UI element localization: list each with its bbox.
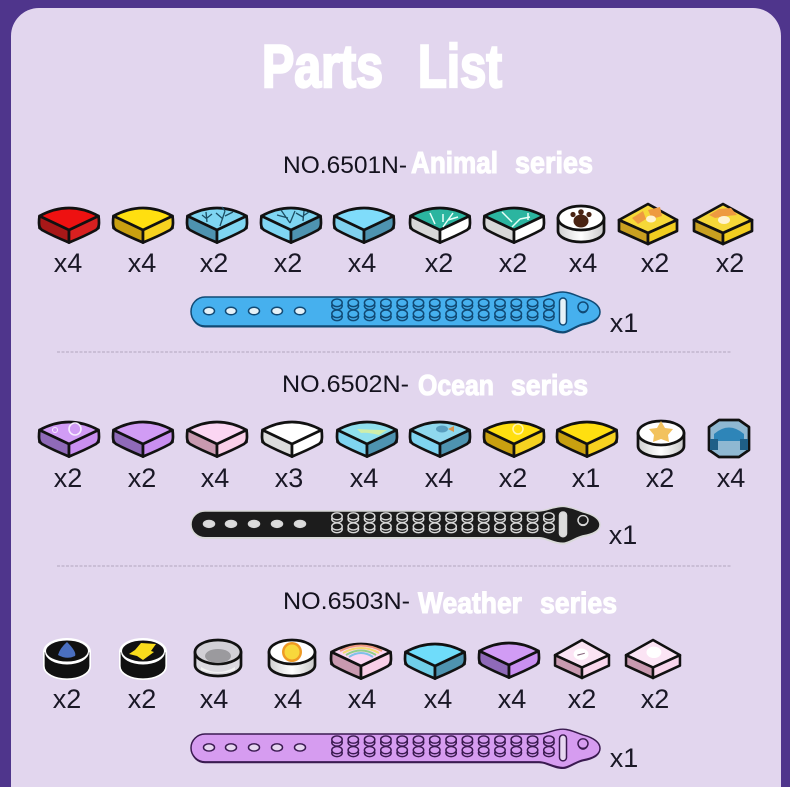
quantity labels: weather parts: x4	[274, 684, 302, 714]
icon: cracked blue wedge left	[187, 207, 247, 242]
quantity labels: animal parts: x4	[569, 248, 597, 278]
icon: raindrop disc	[45, 640, 89, 678]
quantity labels: ocean parts: x1	[572, 463, 600, 493]
icon: black wristband	[191, 506, 600, 545]
quantity label: blue wristband: x1	[610, 308, 638, 338]
quantity labels: animal parts: x2	[425, 248, 453, 278]
title: Parts	[262, 33, 383, 100]
icon: red wedge	[39, 208, 99, 242]
quantity labels: ocean parts: x2	[128, 463, 156, 493]
icon: yellow wedge	[113, 208, 173, 242]
icon: lightning disc	[121, 640, 165, 678]
heading: Weather series	[283, 587, 617, 620]
icon: pink tile one	[555, 640, 609, 678]
quantity labels: weather parts: x2	[53, 684, 81, 714]
icon: white wedge	[262, 422, 322, 456]
icon: pink wedge	[187, 422, 247, 456]
section: Animal series	[39, 145, 752, 338]
icon: purple wedge	[479, 643, 539, 678]
icon: fish wedge	[410, 422, 470, 456]
heading: Animal series	[283, 145, 593, 180]
icon: teal wedge right	[484, 208, 544, 242]
icon: yellow wedge	[557, 422, 617, 456]
icon: purple wedge	[113, 422, 173, 456]
title: List	[418, 33, 502, 100]
quantity labels: weather parts: x4	[200, 684, 228, 714]
quantity labels: ocean parts: x4	[717, 463, 745, 493]
quantity labels: animal parts: x4	[54, 248, 82, 278]
icon: transparent blue octagon	[709, 420, 749, 457]
quantity labels: ocean parts: x3	[275, 463, 303, 493]
quantity labels: animal parts: x2	[641, 248, 669, 278]
icon: rainbow wedge	[331, 644, 391, 678]
heading: Ocean series: series	[511, 370, 588, 402]
quantity labels: animal parts: x4	[128, 248, 156, 278]
icon: blue wedge	[334, 208, 394, 242]
quantity labels: ocean parts: x2	[499, 463, 527, 493]
icon: sun disc	[269, 640, 315, 676]
section: Ocean series	[39, 370, 749, 550]
quantity label: black wristband: x1	[609, 520, 637, 550]
heading: Weather series: series	[540, 587, 617, 620]
heading: Animal series: NO.6501N-	[283, 152, 407, 179]
quantity labels: weather parts: x4	[348, 684, 376, 714]
quantity labels: animal parts: x2	[200, 248, 228, 278]
quantity labels: ocean parts: x2	[54, 463, 82, 493]
quantity labels: animal parts	[54, 248, 744, 278]
section: Weather series	[45, 587, 680, 773]
icon: pink tile two	[626, 640, 680, 678]
icon: paw disc	[558, 206, 604, 242]
quantity labels: ocean parts: x2	[646, 463, 674, 493]
icon: yellow bubble wedge	[484, 422, 544, 456]
heading: Weather series: NO.6503N-	[283, 588, 410, 615]
icon: starfish disc	[638, 421, 684, 457]
quantity labels: weather parts: x2	[568, 684, 596, 714]
heading: Ocean series: NO.6502N-	[282, 371, 409, 398]
quantity labels: ocean parts: x4	[201, 463, 229, 493]
quantity labels: weather parts	[53, 684, 669, 714]
heading: Animal series: Animal	[411, 145, 498, 180]
icon: cracked blue wedge right	[261, 208, 321, 242]
quantity labels: animal parts: x2	[716, 248, 744, 278]
icon: clear disc	[195, 640, 241, 676]
heading: Ocean series: Ocean	[418, 370, 494, 402]
quantity labels: weather parts: x2	[641, 684, 669, 714]
quantity labels: weather parts: x4	[424, 684, 452, 714]
quantity labels: ocean parts: x4	[350, 463, 378, 493]
quantity labels: ocean parts: x4	[425, 463, 453, 493]
icon: purple wristband	[191, 729, 600, 769]
icon: yellow cat tile one	[619, 204, 677, 244]
heading: Animal series: series	[515, 145, 593, 180]
icon: yellow cat tile two	[694, 204, 752, 244]
quantity label: purple wristband: x1	[610, 743, 638, 773]
quantity labels: animal parts: x4	[348, 248, 376, 278]
heading: Ocean series	[282, 370, 588, 402]
quantity labels: weather parts: x4	[498, 684, 526, 714]
icon: ocean wave wedge	[337, 422, 397, 456]
icon: teal wedge left	[410, 208, 470, 242]
quantity labels: animal parts: x2	[499, 248, 527, 278]
icon: blue wristband	[191, 292, 600, 334]
title	[262, 33, 502, 100]
quantity labels: ocean parts	[54, 463, 745, 493]
icon: purple bubble wedge	[39, 422, 99, 456]
heading: Weather series: Weather	[418, 587, 522, 620]
icon: blue wedge	[405, 644, 465, 678]
quantity labels: weather parts: x2	[128, 684, 156, 714]
quantity labels: animal parts: x2	[274, 248, 302, 278]
